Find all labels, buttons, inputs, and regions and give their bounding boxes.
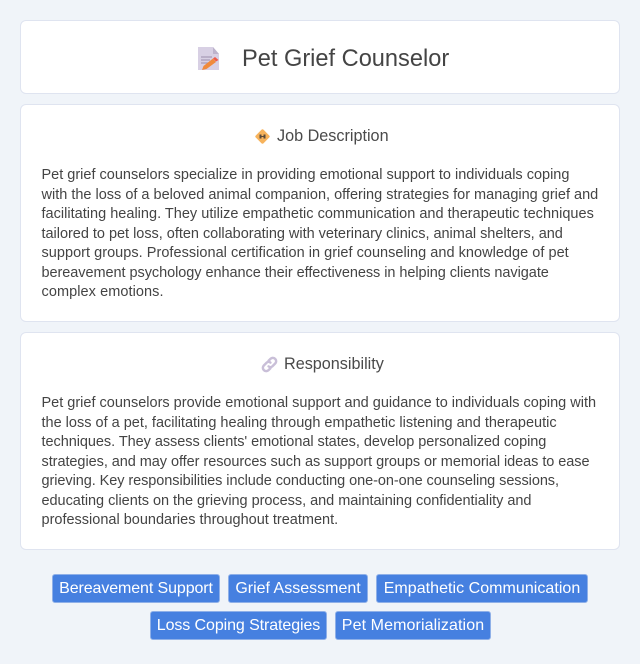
job description text	[42, 167, 598, 300]
tag: Loss Coping Strategies: Loss Coping Strategies	[157, 617, 320, 634]
responsibility text	[42, 395, 596, 528]
job description text: facilitating healing. They utilize empathetic communication and therapeutic techniques	[42, 206, 594, 222]
icon: orange diamond	[255, 129, 270, 144]
job description text: support groups. Professional certification in grief counseling and knowledge of pet	[42, 245, 569, 261]
panel: responsibility	[20, 332, 620, 550]
job description text: with the loss of a beloved animal companion, offering strategies for managing grief and	[42, 186, 598, 202]
heading: responsibility: Responsibility	[284, 355, 384, 373]
panel: job description	[20, 104, 620, 322]
tag: Pet Memorialization: Pet Memorialization	[342, 617, 484, 634]
icon: link	[262, 356, 278, 372]
tag: Pet Memorialization	[335, 611, 491, 640]
responsibility text: the loss of a pet, facilitating healing through empathetic listening and therapeutic	[42, 414, 557, 430]
job description text: tailored to pet loss, often collaborating with veterinary clinics, animal shelters, and	[42, 226, 563, 242]
responsibility text: grieving. Key responsibilities include conducting one-on-one counseling sessions,	[42, 473, 559, 489]
tag: Bereavement Support: Bereavement Support	[59, 580, 213, 597]
responsibility text: educating clients on the grieving process, and maintaining confidentiality and	[42, 492, 531, 508]
tag: Empathetic Communication	[376, 574, 588, 603]
tag: Bereavement Support	[52, 574, 220, 603]
tag: Empathetic Communication: Empathetic Communication	[384, 580, 580, 597]
responsibility text: professional boundaries throughout treatment.	[42, 512, 338, 528]
responsibility text: Pet grief counselors provide emotional support and guidance to individuals coping with	[42, 395, 596, 411]
tag: Grief Assessment: Grief Assessment	[235, 580, 361, 597]
tag: Loss Coping Strategies	[150, 611, 327, 640]
responsibility text: techniques. They assess clients' emotional states, develop personalized coping	[42, 434, 546, 450]
tag: Grief Assessment	[228, 574, 368, 603]
responsibility text: strategies, and may offer resources such as support groups or memorial ideas to ease	[42, 454, 590, 470]
icon: memo with pencil	[198, 47, 219, 70]
job description text: complex emotions.	[42, 284, 164, 300]
title text: Pet Grief Counselor	[242, 46, 449, 72]
heading: job description: Job Description	[277, 127, 389, 145]
job description text: Pet grief counselors specialize in providing emotional support to individuals coping	[42, 167, 569, 183]
job description text: bereavement psychology enhance their effectiveness in helping clients navigate	[42, 264, 549, 280]
panel: title	[20, 20, 620, 94]
